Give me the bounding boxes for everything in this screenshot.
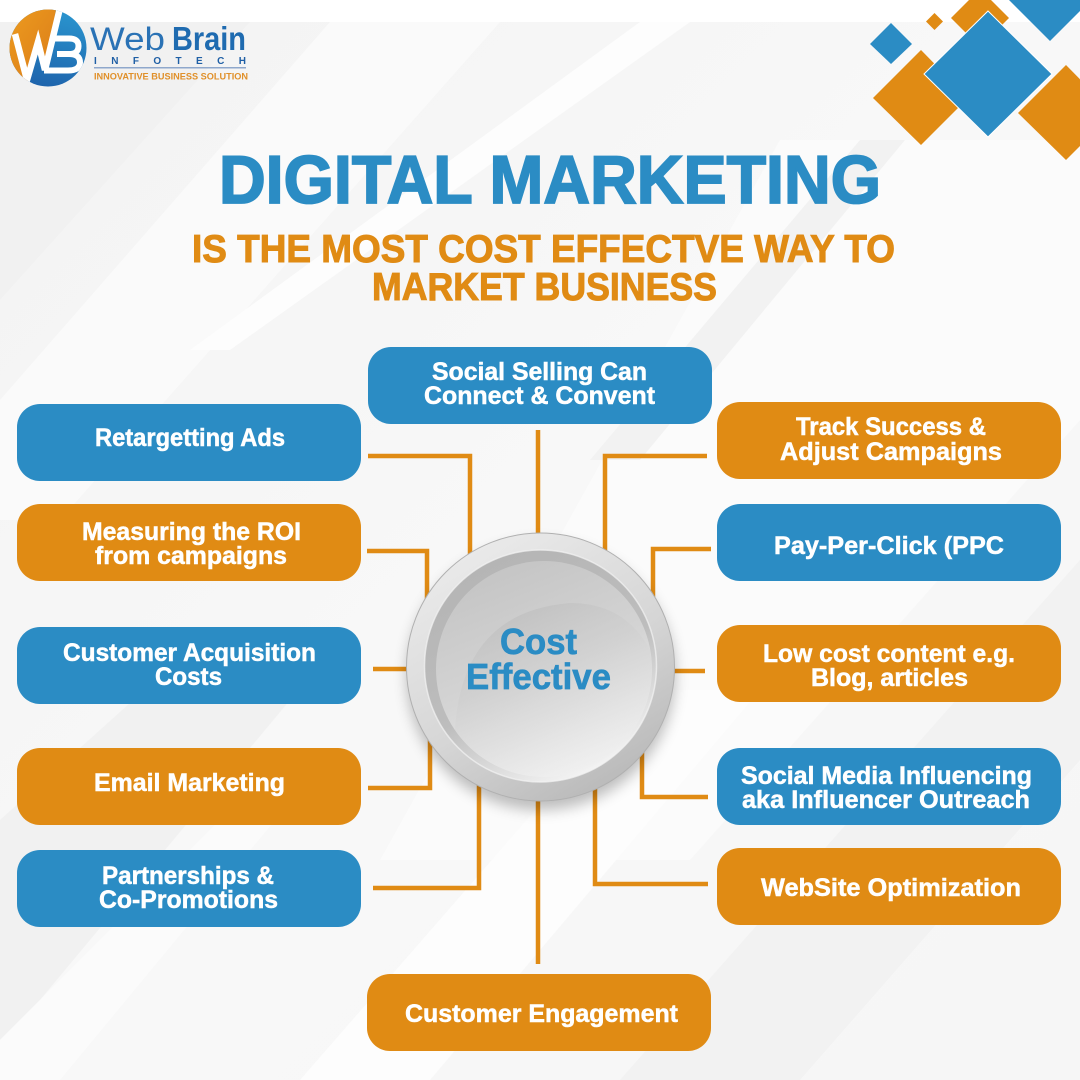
logo infotech: INFOTECH bbox=[94, 56, 246, 67]
box: Pay-Per-Click: Pay-Per-Click (PPC bbox=[774, 532, 1004, 560]
box: Pay-Per-Click bbox=[717, 504, 1061, 581]
box: Customer Acquisition: Costs bbox=[155, 663, 222, 691]
box: Partnerships: Co-Promotions bbox=[99, 886, 278, 914]
box: WebSite Optimization: WebSite Optimization bbox=[761, 874, 1021, 902]
box: Partnerships: Partnerships & bbox=[102, 862, 274, 890]
decorative diamonds bbox=[870, 0, 1080, 160]
logo wordmark bold: Brain bbox=[172, 20, 246, 57]
box: Social Selling: Connect & Convent bbox=[424, 382, 656, 410]
box: Measuring ROI: from campaigns bbox=[95, 542, 287, 570]
box: Low cost content: Blog, articles bbox=[811, 664, 968, 692]
center label: Cost bbox=[500, 621, 577, 662]
box: Track Success: Adjust Campaigns bbox=[780, 438, 1002, 466]
connector lines bbox=[367, 430, 711, 964]
box: Retargetting Ads: Retargetting Ads bbox=[95, 424, 285, 452]
box: Track Success bbox=[717, 402, 1061, 479]
box: Email Marketing: Email Marketing bbox=[94, 769, 285, 797]
logo divider bbox=[94, 67, 246, 68]
box: Social Media Influencing bbox=[717, 748, 1061, 825]
subtitle bbox=[192, 228, 895, 309]
center circle bbox=[406, 533, 675, 810]
logo bbox=[10, 10, 248, 86]
box: Email Marketing bbox=[17, 748, 361, 825]
box: Social Media Influencing: Social Media Influencing bbox=[741, 762, 1032, 790]
subtitle: IS THE MOST COST EFFECTVE WAY TO bbox=[192, 228, 895, 271]
box: WebSite Optimization bbox=[717, 848, 1061, 925]
logo wordmark: Web bbox=[90, 21, 165, 57]
box: Customer Acquisition: Customer Acquisition bbox=[63, 639, 316, 667]
box: Customer Engagement: Customer Engagement bbox=[405, 1000, 679, 1028]
box: Measuring ROI bbox=[17, 504, 361, 581]
box: Low cost content bbox=[717, 625, 1061, 702]
box: Social Media Influencing: aka Influencer Outreach bbox=[742, 786, 1030, 814]
center label bbox=[466, 621, 611, 697]
box: Customer Acquisition bbox=[17, 627, 361, 704]
title: DIGITAL MARKETING bbox=[219, 142, 881, 218]
center label: Effective bbox=[466, 656, 611, 697]
box: Measuring ROI: Measuring the ROI bbox=[82, 518, 301, 546]
subtitle: MARKET BUSINESS bbox=[372, 266, 717, 309]
box: Social Selling bbox=[368, 347, 712, 424]
box: Customer Engagement bbox=[367, 974, 711, 1051]
logo emblem bbox=[10, 10, 86, 86]
logo tagline: INNOVATIVE BUSINESS SOLUTION bbox=[94, 72, 248, 82]
box: Track Success: Track Success & bbox=[796, 413, 986, 441]
box: Social Selling: Social Selling Can bbox=[432, 358, 647, 386]
box: Partnerships bbox=[17, 850, 361, 927]
box: Retargetting Ads bbox=[17, 404, 361, 481]
box: Low cost content: Low cost content e.g. bbox=[763, 640, 1015, 668]
